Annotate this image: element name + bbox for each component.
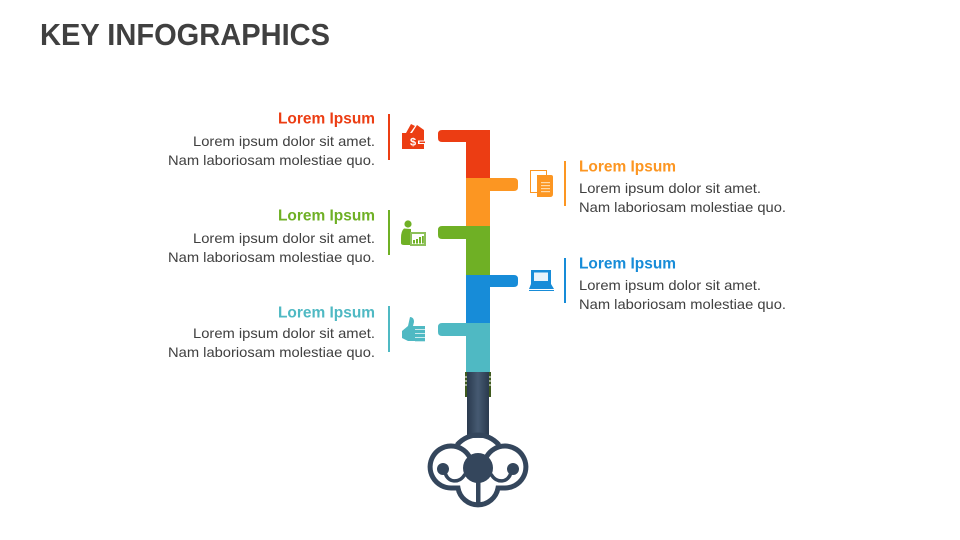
key segment: green bbox=[438, 226, 490, 275]
body text bbox=[579, 277, 786, 312]
icon: thumbs up bbox=[402, 317, 425, 341]
heading: Lorem Ipsum bbox=[278, 304, 375, 322]
callout: green bbox=[168, 208, 425, 265]
title: KEY INFOGRAPHICS bbox=[40, 17, 330, 52]
heading: Lorem Ipsum bbox=[278, 208, 375, 224]
callout: red bbox=[168, 110, 425, 168]
body text: Nam laboriosam molestiae quo. bbox=[168, 344, 375, 360]
heading: Lorem Ipsum bbox=[579, 158, 676, 176]
body text bbox=[168, 133, 375, 168]
key segment: blue bbox=[466, 275, 518, 323]
icon: wallet with money bbox=[402, 124, 425, 149]
heading: Lorem Ipsum bbox=[579, 256, 676, 272]
divider bbox=[564, 161, 566, 206]
icon: laptop bbox=[529, 270, 554, 291]
key segment: red bbox=[438, 130, 490, 178]
body text: Lorem ipsum dolor sit amet. bbox=[579, 180, 761, 196]
callout: blue bbox=[529, 256, 786, 312]
body text: Nam laboriosam molestiae quo. bbox=[579, 296, 786, 312]
body text: Lorem ipsum dolor sit amet. bbox=[193, 133, 375, 149]
key segment: orange bbox=[466, 178, 518, 226]
body text bbox=[168, 230, 375, 265]
body text bbox=[168, 325, 375, 360]
divider bbox=[388, 306, 390, 352]
body text: Lorem ipsum dolor sit amet. bbox=[193, 325, 375, 341]
icon: presenter with chart bbox=[401, 220, 425, 245]
body text: Nam laboriosam molestiae quo. bbox=[168, 152, 375, 168]
callout: orange bbox=[530, 158, 786, 215]
icon: documents bbox=[530, 170, 553, 197]
heading: Lorem Ipsum bbox=[278, 110, 375, 128]
body text: Lorem ipsum dolor sit amet. bbox=[579, 277, 761, 293]
body text: Nam laboriosam molestiae quo. bbox=[579, 199, 786, 215]
divider bbox=[388, 210, 390, 255]
key bbox=[430, 130, 526, 506]
divider bbox=[564, 258, 566, 303]
callout: teal bbox=[168, 304, 425, 360]
key collar bbox=[465, 372, 491, 397]
icon: wallet with money: $ bbox=[410, 136, 416, 148]
key shaft bbox=[467, 372, 489, 438]
body text: Lorem ipsum dolor sit amet. bbox=[193, 230, 375, 246]
body text: Nam laboriosam molestiae quo. bbox=[168, 249, 375, 265]
body text bbox=[579, 180, 786, 215]
key bow bbox=[430, 435, 526, 506]
divider bbox=[388, 114, 390, 160]
key segment: teal bbox=[438, 323, 490, 372]
